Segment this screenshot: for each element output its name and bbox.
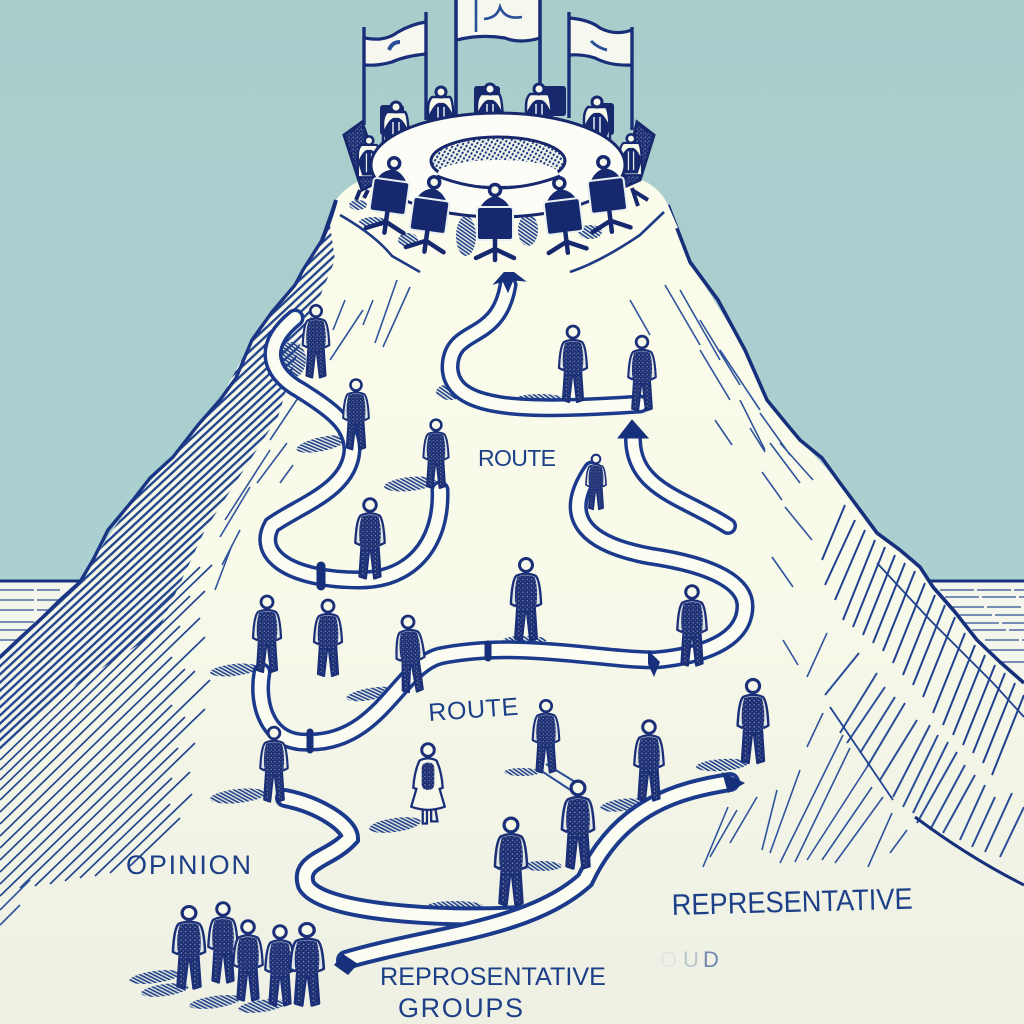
route: long middle ribbon (261, 470, 745, 750)
thin link between two walkers (540, 764, 580, 793)
left flank hatching (0, 200, 410, 925)
round table (371, 113, 625, 217)
ridge line (0, 200, 336, 657)
right flank hatching (630, 205, 1024, 885)
label: reprosentative groups: GROUPS (398, 993, 523, 1023)
route: right side short ribbon (618, 420, 728, 526)
lower band strokes (703, 633, 907, 867)
three summit flags (364, 0, 632, 130)
flag: left (364, 12, 426, 125)
spaced slope strokes (0, 565, 212, 896)
sea at horizon (0, 581, 1024, 1024)
route: upper right ribbon (450, 268, 640, 408)
summit plateau (322, 175, 678, 272)
sky background (0, 0, 1024, 582)
label: route upper: ROUTE (478, 445, 556, 471)
group of people at route start (173, 903, 324, 1006)
walking figures on the routes (253, 305, 768, 906)
route: lower loop ribbon (285, 798, 520, 916)
flag: right (569, 12, 632, 130)
route: bottom ribbon to start (334, 772, 745, 975)
label: representative right: REPRESENTATIVE (671, 883, 913, 922)
long slope contours (830, 563, 1024, 800)
arrow head: bottom start marker (334, 954, 358, 975)
faint label fragment: O (660, 947, 677, 972)
label: opinion: OPINION (126, 850, 251, 880)
arrow head: bottom route end (722, 772, 745, 793)
side chairs with people (344, 122, 654, 206)
faint label fragment: U (683, 947, 699, 972)
label: reprosentative groups: REPROSENTATIVE (380, 963, 606, 991)
upper slope strokes (630, 285, 813, 665)
arrow head: right route (618, 420, 648, 438)
route: left serpentine ribbon (268, 318, 440, 586)
arrow head: top route (494, 268, 525, 292)
flag: centre (456, 0, 540, 115)
ridge band strokes (822, 505, 1024, 775)
ridge line (668, 205, 1024, 683)
table centre opening (431, 137, 565, 188)
label: route middle: ROUTE (427, 693, 519, 727)
round table people, back row (380, 84, 614, 150)
faint label fragment: D (703, 947, 719, 972)
front row chairs (366, 154, 631, 260)
dense ridge band (0, 225, 335, 750)
middle band strokes (825, 653, 1024, 857)
ground shadows (128, 342, 748, 1015)
